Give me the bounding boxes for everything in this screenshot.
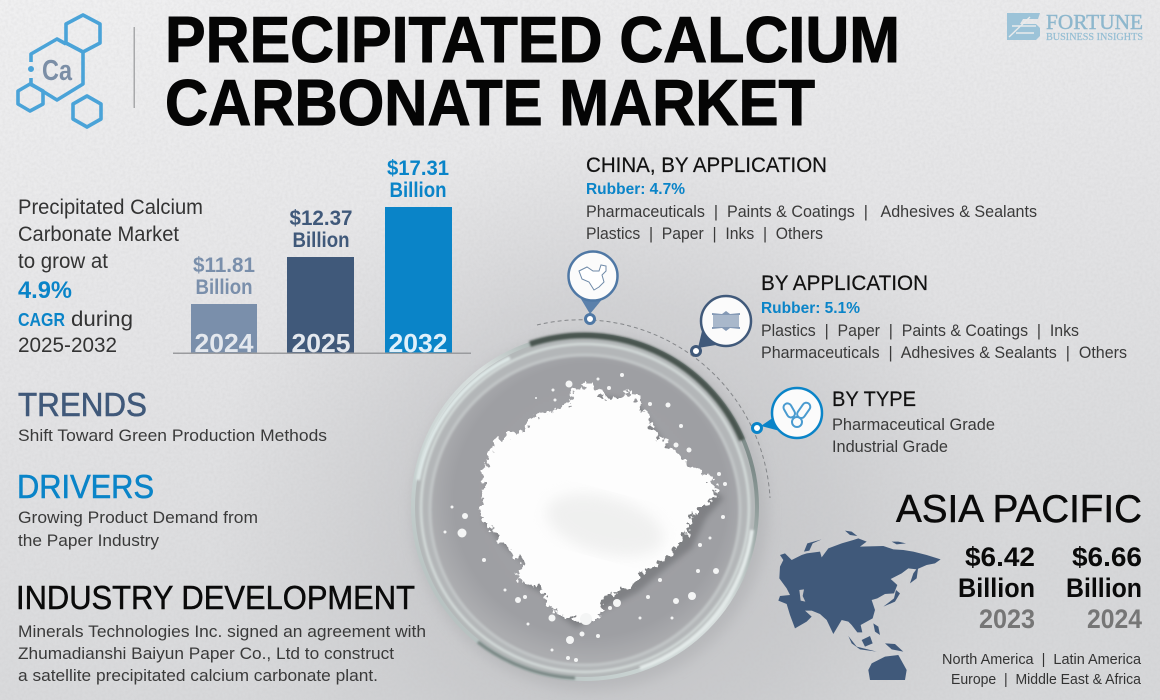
bar 2025: $12.37 bbox=[290, 207, 352, 230]
text block: market growth summary: 4.9% bbox=[18, 277, 72, 304]
industry development section: Zhumadianshi Baiyun Paper Co., Ltd to construct bbox=[18, 644, 394, 663]
brand logo: Fortune Business Insights: BUSINESS INSIGHTS bbox=[1046, 32, 1143, 43]
metric: 2023: 2023 bbox=[979, 604, 1035, 634]
by application text: Plastics | Paper | Paints & Coatings | Inks bbox=[761, 321, 1079, 340]
text block: market growth summary: Precipitated Calcium bbox=[18, 196, 203, 219]
drivers section: Growing Product Demand from bbox=[18, 508, 258, 527]
industry development section: a satellite precipitated calcium carbonate plant. bbox=[18, 666, 378, 685]
title: CARBONATE MARKET bbox=[165, 66, 815, 139]
drivers section bbox=[17, 468, 258, 550]
bar 2032: Billion bbox=[390, 179, 446, 202]
bar 2032: $17.31 bbox=[387, 157, 449, 180]
china by application text: Pharmaceuticals | Paints & Coatings | Adhesives & Sealants bbox=[586, 202, 1037, 221]
dashed orbit arc bbox=[537, 320, 770, 498]
powder shadow bbox=[484, 394, 724, 628]
metric: 2023: $6.42 bbox=[965, 542, 1035, 572]
by type text: BY TYPE bbox=[832, 388, 916, 411]
pin: by application bbox=[692, 296, 751, 356]
metric: 2024: 2024 bbox=[1087, 604, 1142, 634]
drivers section: DRIVERS bbox=[17, 468, 154, 505]
icon: application structure bbox=[712, 311, 740, 331]
text block: market growth summary: 2025-2032 bbox=[18, 334, 117, 357]
heading: Asia Pacific: ASIA PACIFIC bbox=[896, 488, 1142, 531]
logo element symbol: Ca bbox=[42, 55, 73, 87]
text block: market growth summary: to grow at bbox=[18, 250, 108, 273]
metric: 2023 bbox=[958, 542, 1035, 634]
china by application text: Rubber: 4.7% bbox=[586, 181, 685, 198]
bar 2032: 2032 bbox=[388, 328, 448, 358]
logo divider bbox=[134, 27, 135, 108]
bar 2024: Billion bbox=[196, 276, 252, 299]
by application text: Pharmaceuticals | Adhesives & Sealants | Others bbox=[761, 343, 1127, 362]
china by application text bbox=[586, 154, 1037, 243]
other regions: North America | Latin America bbox=[942, 651, 1142, 668]
bar chart: market size bbox=[173, 157, 471, 358]
icon: China map bbox=[579, 265, 606, 290]
bar 2025: 2025 bbox=[292, 328, 350, 358]
by type text: Industrial Grade bbox=[832, 437, 948, 456]
powder pile bbox=[480, 383, 720, 620]
trends section: TRENDS bbox=[18, 386, 147, 423]
bar 2025: Billion bbox=[292, 229, 350, 252]
text block: market growth summary: CAGR bbox=[18, 310, 65, 330]
title: PRECIPITATED CALCIUM bbox=[165, 3, 900, 76]
by application text bbox=[761, 272, 1127, 362]
trends section: Shift Toward Green Production Methods bbox=[18, 426, 327, 445]
other regions bbox=[942, 651, 1142, 688]
by type text: Pharmaceutical Grade bbox=[832, 415, 995, 434]
brand logo: Fortune Business Insights bbox=[1007, 10, 1143, 43]
scattered powder grains bbox=[444, 373, 727, 662]
other regions: Europe | Middle East & Africa bbox=[951, 671, 1142, 688]
industry development section: Minerals Technologies Inc. signed an agreement with bbox=[18, 622, 426, 641]
text block: market growth summary: Carbonate Market bbox=[18, 223, 179, 246]
trends section bbox=[18, 386, 327, 445]
metric: 2024: $6.66 bbox=[1072, 542, 1142, 572]
bar 2024 bbox=[191, 254, 257, 358]
icon: calcium hexagon logo bbox=[18, 15, 101, 127]
title bbox=[165, 3, 900, 139]
text block: market growth summary: during bbox=[71, 308, 133, 331]
industry development section: INDUSTRY DEVELOPMENT bbox=[16, 579, 415, 616]
bar 2025 bbox=[287, 207, 354, 358]
bar 2024: $11.81 bbox=[193, 254, 255, 277]
industry development section bbox=[16, 579, 426, 685]
by application text: Rubber: 5.1% bbox=[761, 300, 860, 317]
icon: pills bbox=[782, 401, 812, 427]
photo: petri dish with white powder bbox=[412, 334, 768, 690]
metric: 2023: Billion bbox=[958, 573, 1035, 603]
bar 2024: 2024 bbox=[194, 328, 254, 358]
metric: 2024: Billion bbox=[1066, 573, 1142, 603]
bar 2032 bbox=[385, 157, 452, 358]
drivers section: the Paper Industry bbox=[18, 531, 159, 550]
pin: by type bbox=[752, 388, 822, 438]
china by application text: CHINA, BY APPLICATION bbox=[586, 154, 827, 177]
by type text bbox=[832, 388, 995, 456]
pin: China bbox=[568, 252, 618, 324]
map: Asia Pacific bbox=[778, 531, 941, 680]
by application text: BY APPLICATION bbox=[761, 272, 928, 295]
metric: 2024 bbox=[1066, 542, 1142, 634]
china by application text: Plastics | Paper | Inks | Others bbox=[586, 224, 823, 243]
brand logo: Fortune Business Insights: FORTUNE bbox=[1046, 10, 1143, 34]
text block: market growth summary bbox=[18, 196, 203, 357]
